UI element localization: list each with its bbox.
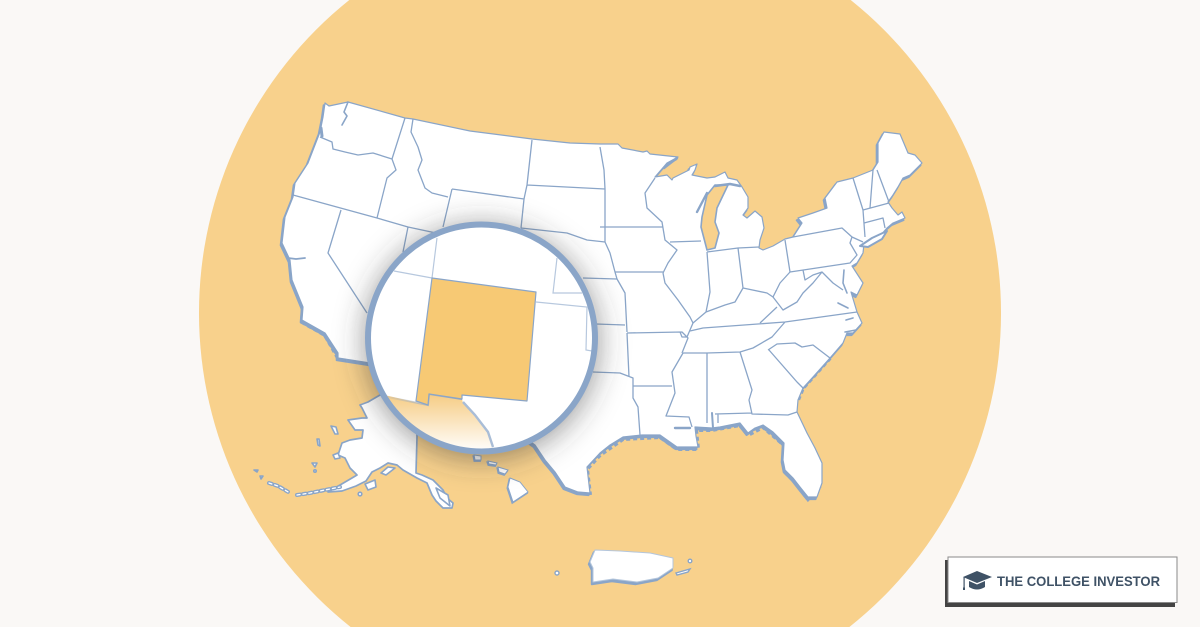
- jagged coast texture: [283, 243, 830, 499]
- Alaska islands: [254, 426, 450, 506]
- Puerto Rico islets: [555, 559, 692, 575]
- Mexico area with fade: [387, 394, 492, 448]
- New Mexico highlighted: [416, 278, 536, 405]
- map: Hawaii: [473, 455, 528, 503]
- background circle: [199, 0, 1001, 627]
- neighbouring state lines in lens: [394, 238, 592, 351]
- Mexico border lines: [388, 394, 462, 405]
- Aleutian chain: [269, 483, 340, 495]
- map: contiguous United States: [281, 102, 922, 499]
- logo wordmark: THE COLLEGE INVESTOR: [997, 573, 1160, 589]
- inland water details: [288, 102, 856, 428]
- logo: The College Investor: [945, 557, 1177, 607]
- Long Island: [860, 231, 887, 247]
- Lake Michigan: [701, 185, 728, 250]
- state borders: [293, 118, 889, 435]
- map: Puerto Rico: [555, 550, 692, 584]
- map: Alaska: [254, 395, 453, 508]
- magnifier lens shadow: [364, 225, 598, 459]
- lens ring: [368, 224, 595, 452]
- icon: graduation cap: [963, 571, 992, 590]
- magnifier lens: [368, 224, 595, 452]
